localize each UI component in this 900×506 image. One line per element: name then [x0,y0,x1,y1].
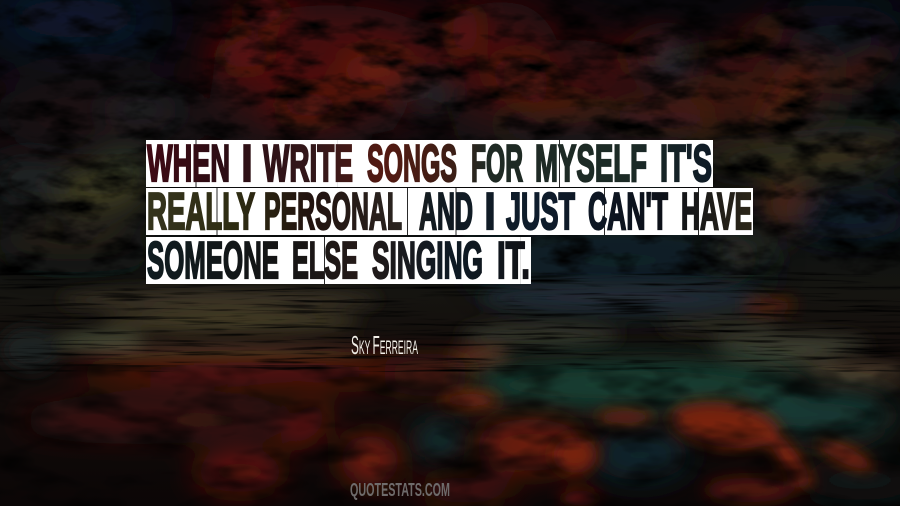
quote line 2: AND [419,183,473,241]
cloud texture overlay [0,0,900,275]
quote text bands [146,135,753,290]
quote line 3: SINGING [372,232,483,290]
quote line 1: MYSELF [535,135,647,193]
quote line 3 [146,232,531,290]
quote line 1: WRITE [263,135,353,193]
sky clouds and colour glow [0,0,900,300]
quote line 3: IT. [497,232,530,290]
quote line 1: I [242,135,252,193]
quote line 1: SONGS [367,135,457,193]
quote line 1 [146,135,713,193]
quote line 3: SOMEONE [147,232,279,290]
quote line 1: WHEN [147,135,230,193]
quote line 2 [146,183,753,241]
ripple texture over the flats [0,272,900,372]
site watermark: QUOTESTATS.COM [350,479,450,500]
water flats and reflections [0,272,900,506]
author name: SKY FERREIRA [351,330,418,360]
quote line 2: REALLY [147,183,255,241]
quote line 2: PERSONAL [264,183,402,241]
quote line 2: CAN'T [588,183,668,241]
quote line 1: IT'S [660,135,712,193]
quote line 3: ELSE [292,232,358,290]
quote line 2: HAVE [681,183,752,241]
quote line 1: FOR [471,135,523,193]
quote line 2: I [484,183,496,241]
soft texture overlay on the water [0,365,900,506]
quote line 2: JUST [506,183,575,241]
